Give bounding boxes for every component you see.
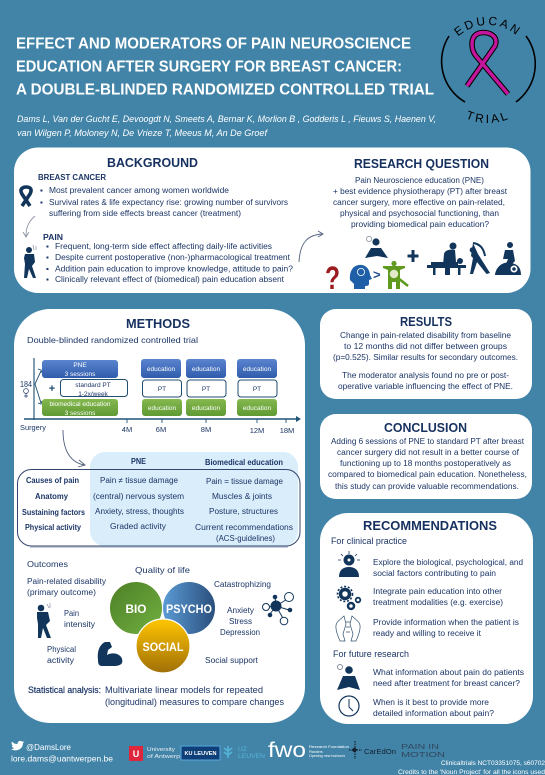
chart: trial timeline: 8M bbox=[201, 425, 211, 434]
logo: FWO: Opening new horizons bbox=[309, 754, 345, 758]
icon: head bbox=[350, 265, 372, 289]
text: pain: Despite current postoperative (non-)pharmacological treatment bbox=[55, 253, 291, 262]
table: PNE versus biomedical education: Muscles & joints bbox=[212, 492, 272, 501]
chart: trial timeline: education bbox=[192, 405, 220, 412]
text: provide bbox=[373, 618, 519, 638]
text: breast cancer: BREAST CANCER bbox=[38, 173, 106, 182]
outcomes labels bbox=[27, 560, 271, 665]
text: breast cancer: suffering from side effects breast cancer (treatment) bbox=[49, 209, 241, 218]
icon: biomedical figure with magnifier bbox=[383, 261, 408, 289]
logo: CarEdOn: CarEdOn bbox=[364, 749, 396, 756]
footer: partner logos bbox=[129, 739, 445, 762]
panel: methods bbox=[14, 309, 305, 723]
icon: question mark: ? bbox=[325, 260, 340, 296]
icon: clock bbox=[339, 696, 359, 716]
footer: contact bbox=[11, 741, 114, 764]
logo: Pain in Motion: PAIN IN bbox=[401, 742, 439, 751]
table: PNE versus biomedical education bbox=[18, 452, 300, 547]
diagram: biopsychosocial circles: BIO bbox=[126, 602, 146, 616]
chart: trial timeline: 12M bbox=[250, 426, 264, 435]
text: statistical analysis bbox=[28, 685, 284, 707]
footer: contact: @DamsLore bbox=[26, 743, 72, 752]
icon: person with idea bbox=[338, 551, 360, 577]
chart: trial timeline: education bbox=[243, 366, 271, 373]
text: pain: ▪ bbox=[46, 264, 49, 274]
text: breast cancer: ▪ bbox=[40, 198, 43, 207]
text: integrate: treatment modalities (e.g. exercise) bbox=[373, 598, 503, 607]
table: PNE versus biomedical education: Pain = tissue damage bbox=[206, 477, 284, 486]
text: integrate: Integrate pain education into other bbox=[373, 587, 502, 596]
title: EFFECT AND MODERATORS OF PAIN NEUROSCIENCE bbox=[16, 36, 411, 52]
text: pain: ▪ bbox=[46, 275, 49, 284]
footer: credits bbox=[398, 760, 545, 775]
text: research question: providing biomedical pain education? bbox=[351, 220, 490, 229]
text: research question: + best evidence physiotherapy (PT) after breast bbox=[333, 187, 508, 196]
chart: trial timeline bbox=[20, 358, 301, 435]
outcomes labels: Social support bbox=[205, 656, 259, 665]
chart: trial timeline: 1-2x/week bbox=[78, 391, 109, 398]
text: explore bbox=[373, 558, 523, 578]
logo: university of antwerp bbox=[129, 746, 180, 761]
text: conclusion: Adding 6 sessions of PNE to standard PT after breast bbox=[331, 437, 525, 446]
chart: trial timeline: PNE bbox=[73, 362, 87, 369]
chart: trial timeline: education bbox=[147, 366, 175, 373]
text: research question: cancer surgery, more effective on pain-related, bbox=[333, 198, 505, 207]
icon: person in pain bbox=[24, 245, 36, 278]
icon: gears bbox=[338, 586, 360, 609]
outcomes labels: (primary outcome) bbox=[27, 588, 96, 597]
outcomes labels: Pain-related disability bbox=[27, 577, 106, 586]
icon: emotion network bbox=[262, 592, 294, 625]
chart: trial timeline: 6M bbox=[156, 425, 166, 434]
heading: methods: METHODS bbox=[126, 316, 190, 331]
chart: trial timeline: 18M bbox=[280, 426, 294, 435]
table: PNE versus biomedical education: Graded activity bbox=[110, 522, 166, 531]
text: statistical analysis: Statistical analysis: bbox=[28, 685, 101, 695]
outcomes labels: Anxiety bbox=[227, 606, 254, 615]
text: when: detailed information about pain? bbox=[373, 709, 495, 718]
logo: EDUCAN trial bbox=[440, 16, 536, 124]
table: PNE versus biomedical education: (ACS-guidelines) bbox=[216, 534, 275, 543]
text: results: operative variable influencing the effect of PNE. bbox=[338, 382, 513, 391]
chart: trial timeline: biomedical education bbox=[49, 401, 111, 408]
panel: conclusion bbox=[320, 414, 532, 499]
text: results: The moderator analysis found no pre or post- bbox=[342, 371, 509, 380]
outcomes labels: Stress bbox=[229, 617, 252, 626]
text: conclusion: compared to biomedical pain education. Nonetheless, bbox=[328, 470, 527, 479]
icon: person reading bbox=[365, 236, 388, 258]
logo: university of antwerp: University bbox=[147, 747, 175, 753]
logo: UZ Leuven bbox=[224, 746, 265, 760]
logo: university of antwerp: of Antwerp bbox=[147, 754, 180, 760]
diagram: biopsychosocial circles: SOCIAL bbox=[142, 640, 184, 654]
heading: results: RESULTS bbox=[400, 314, 452, 329]
text: breast cancer: Most prevalent cancer among women worldwide bbox=[49, 186, 230, 195]
text: pain: PAIN bbox=[43, 233, 63, 242]
chart: trial timeline: PT bbox=[202, 386, 210, 393]
text: for future research: For future research bbox=[333, 649, 409, 659]
chart: trial timeline: education bbox=[192, 366, 220, 373]
text: what information bbox=[373, 668, 524, 688]
heading: recommendations: RECOMMENDATIONS bbox=[363, 518, 497, 533]
logo: KU Leuven: KU LEUVEN bbox=[184, 751, 217, 757]
icon: flexed arm bbox=[98, 642, 122, 666]
logo: EDUCAN trial: EDUCAN bbox=[454, 16, 520, 36]
text: pain: ▪ bbox=[46, 242, 49, 251]
logo: KU Leuven bbox=[181, 746, 220, 760]
chart: trial timeline: education bbox=[148, 405, 176, 412]
text: research question bbox=[333, 176, 508, 229]
outcomes labels: Outcomes bbox=[27, 560, 68, 569]
text: conclusion: functioning up to 18 months postoperatively as bbox=[340, 459, 511, 468]
heading: research question: RESEARCH QUESTION bbox=[354, 156, 489, 171]
outcomes labels: Physical bbox=[47, 645, 76, 654]
authors: van Wilgen P, Moloney N, De Vrieze T, Meeus M, An De Groef bbox=[17, 128, 268, 138]
icon: two people facing bbox=[336, 616, 360, 641]
diagram: biopsychosocial circles bbox=[110, 582, 216, 673]
heading: conclusion: CONCLUSION bbox=[384, 420, 467, 435]
text: research question: physical and psychosocial functioning, than bbox=[340, 209, 499, 218]
text: design: Double-blinded randomized controlled trial bbox=[27, 335, 198, 345]
logo: EDUCAN trial: TRIAL bbox=[468, 110, 508, 124]
text: when bbox=[373, 698, 495, 718]
table: PNE versus biomedical education: (central) nervous system bbox=[93, 492, 184, 501]
text: for clinical practice: For clinical practice bbox=[331, 536, 407, 546]
logo: university of antwerp: U bbox=[133, 749, 139, 759]
chart: trial timeline: 184 bbox=[20, 380, 32, 389]
logo: FWO: Flanders bbox=[309, 750, 323, 754]
logo: CarEdOn bbox=[349, 741, 396, 759]
text: results: to 12 months did not differ between groups bbox=[344, 342, 507, 351]
text: explore: social factors contributing to pain bbox=[373, 569, 496, 578]
outcomes labels: Pain bbox=[64, 609, 79, 618]
icon: physiotherapy table bbox=[427, 242, 466, 275]
logo: Pain in Motion bbox=[401, 742, 445, 759]
logo: FWO bbox=[268, 739, 349, 762]
icon: plus bbox=[408, 250, 418, 262]
text: pain: Addition pain education to improve knowledge, attitude to pain? bbox=[55, 264, 294, 274]
symbol: greater than: > bbox=[373, 267, 381, 282]
panel: background and research question bbox=[14, 148, 530, 296]
text: what information: What information about pain do patients bbox=[373, 668, 524, 677]
authors bbox=[17, 114, 436, 138]
text: conclusion: this study can provide valuable recommendations. bbox=[335, 482, 519, 491]
table: PNE versus biomedical education: PNE bbox=[131, 457, 147, 466]
outcomes labels: intensity bbox=[64, 620, 95, 629]
text: pain: Frequent, long-term side effect affecting daily-life activities bbox=[55, 242, 272, 251]
table: PNE versus biomedical education: Anxiety, stress, thoughts bbox=[95, 507, 184, 516]
text: results: Change in pain-related disability from baseline bbox=[340, 331, 512, 340]
chart: trial timeline: 3 sessions bbox=[65, 410, 96, 417]
table: PNE versus biomedical education: Posture, structures bbox=[209, 507, 278, 516]
text: results: (p=0.525). Similar results for secondary outcomes. bbox=[333, 353, 518, 362]
text: pain bbox=[43, 233, 294, 284]
title: EDUCATION AFTER SURGERY FOR BREAST CANCER: bbox=[16, 58, 402, 76]
chart: trial timeline: + bbox=[49, 383, 55, 395]
text: statistical analysis: (longitudinal) measures to compare changes bbox=[105, 697, 284, 707]
icon: person in pain bbox=[37, 603, 51, 638]
chart: trial timeline: education bbox=[243, 405, 271, 412]
diagram: biopsychosocial circles: PSYCHO bbox=[166, 602, 212, 616]
icon: twitter bird bbox=[11, 741, 24, 750]
icon: exercise bike bbox=[495, 242, 521, 275]
icon: person reading bbox=[337, 664, 360, 690]
logo: UZ Leuven: LEUVEN bbox=[238, 753, 265, 760]
icon: stretching person bbox=[470, 243, 490, 274]
outcomes labels: Quality of life bbox=[135, 565, 190, 575]
text: explore: Explore the biological, psychological, and bbox=[373, 558, 523, 567]
text: when: When is it best to provide more bbox=[373, 698, 490, 707]
table: PNE versus biomedical education: Biomedical education bbox=[205, 458, 283, 467]
title: A DOUBLE-BLINDED RANDOMIZED CONTROLLED TRIAL bbox=[16, 82, 434, 98]
chart: trial timeline: 3 sessions bbox=[65, 371, 96, 378]
table: PNE versus biomedical education: Anatomy bbox=[35, 492, 69, 501]
footer: contact: lore.dams@uantwerpen.be bbox=[11, 754, 114, 764]
text: integrate bbox=[373, 587, 503, 607]
outcomes labels: activity bbox=[47, 656, 74, 665]
text: breast cancer bbox=[38, 173, 288, 218]
arrow: breast cancer to pain bbox=[23, 216, 35, 237]
chart: trial timeline: 4M bbox=[122, 425, 132, 434]
text: breast cancer: ▪ bbox=[40, 186, 43, 195]
text: breast cancer: Survival rates & life expectancy rise: growing number of survivors bbox=[49, 198, 288, 207]
table: PNE versus biomedical education: Current recommendations bbox=[195, 523, 293, 532]
text: provide: Provide information when the patient is bbox=[373, 618, 519, 627]
logo: FWO: fwo bbox=[268, 739, 306, 762]
logo: UZ Leuven: UZ bbox=[238, 746, 247, 753]
arrow: to research question bbox=[299, 231, 323, 262]
text: results bbox=[333, 331, 518, 391]
icon: ribbon bbox=[21, 187, 31, 206]
text: conclusion bbox=[328, 437, 527, 491]
text: pain: Clinically relevant effect of (biomedical) pain education absent bbox=[55, 275, 285, 284]
panel: recommendations bbox=[320, 513, 533, 724]
title bbox=[16, 36, 434, 98]
chart: trial timeline: standard PT bbox=[75, 382, 111, 389]
text: statistical analysis: Multivariate linear models for repeated bbox=[105, 685, 263, 695]
text: conclusion: cancer surgery did not result in a better course of bbox=[337, 448, 520, 457]
outcomes labels: Depression bbox=[220, 628, 260, 637]
logo: FWO: Research Foundation bbox=[309, 745, 349, 749]
outcomes labels: Catastrophizing bbox=[214, 580, 271, 589]
table: PNE versus biomedical education: Pain ≠ tissue damage bbox=[100, 476, 179, 485]
table: PNE versus biomedical education: Sustaining factors bbox=[22, 508, 85, 517]
chart: trial timeline: PT bbox=[158, 386, 166, 393]
logo: Pain in Motion: MOTION bbox=[401, 750, 445, 759]
arrow: to education content bbox=[63, 430, 85, 467]
text: pain: ▪ bbox=[46, 253, 49, 262]
authors: Dams L, Van der Gucht E, Devoogdt N, Smeets A, Bernar K, Morlion B , Godderis L , Fieuws S, Haenen V, bbox=[17, 114, 436, 124]
table: PNE versus biomedical education: Physical activity bbox=[25, 523, 81, 532]
text: research question: Pain Neuroscience education (PNE) bbox=[355, 176, 484, 185]
text: what information: need after treatment for breast cancer? bbox=[373, 679, 521, 688]
table: PNE versus biomedical education: Causes of pain bbox=[26, 476, 79, 485]
chart: trial timeline: PT bbox=[253, 386, 261, 393]
panel: results bbox=[320, 309, 532, 399]
chart: trial timeline: Surgery bbox=[20, 423, 46, 432]
footer: credits: Clinicaltrials NCT03351075, s60702 bbox=[441, 760, 545, 767]
text: provide: ready and willing to receive it bbox=[373, 629, 482, 638]
heading: background: BACKGROUND bbox=[107, 155, 198, 170]
